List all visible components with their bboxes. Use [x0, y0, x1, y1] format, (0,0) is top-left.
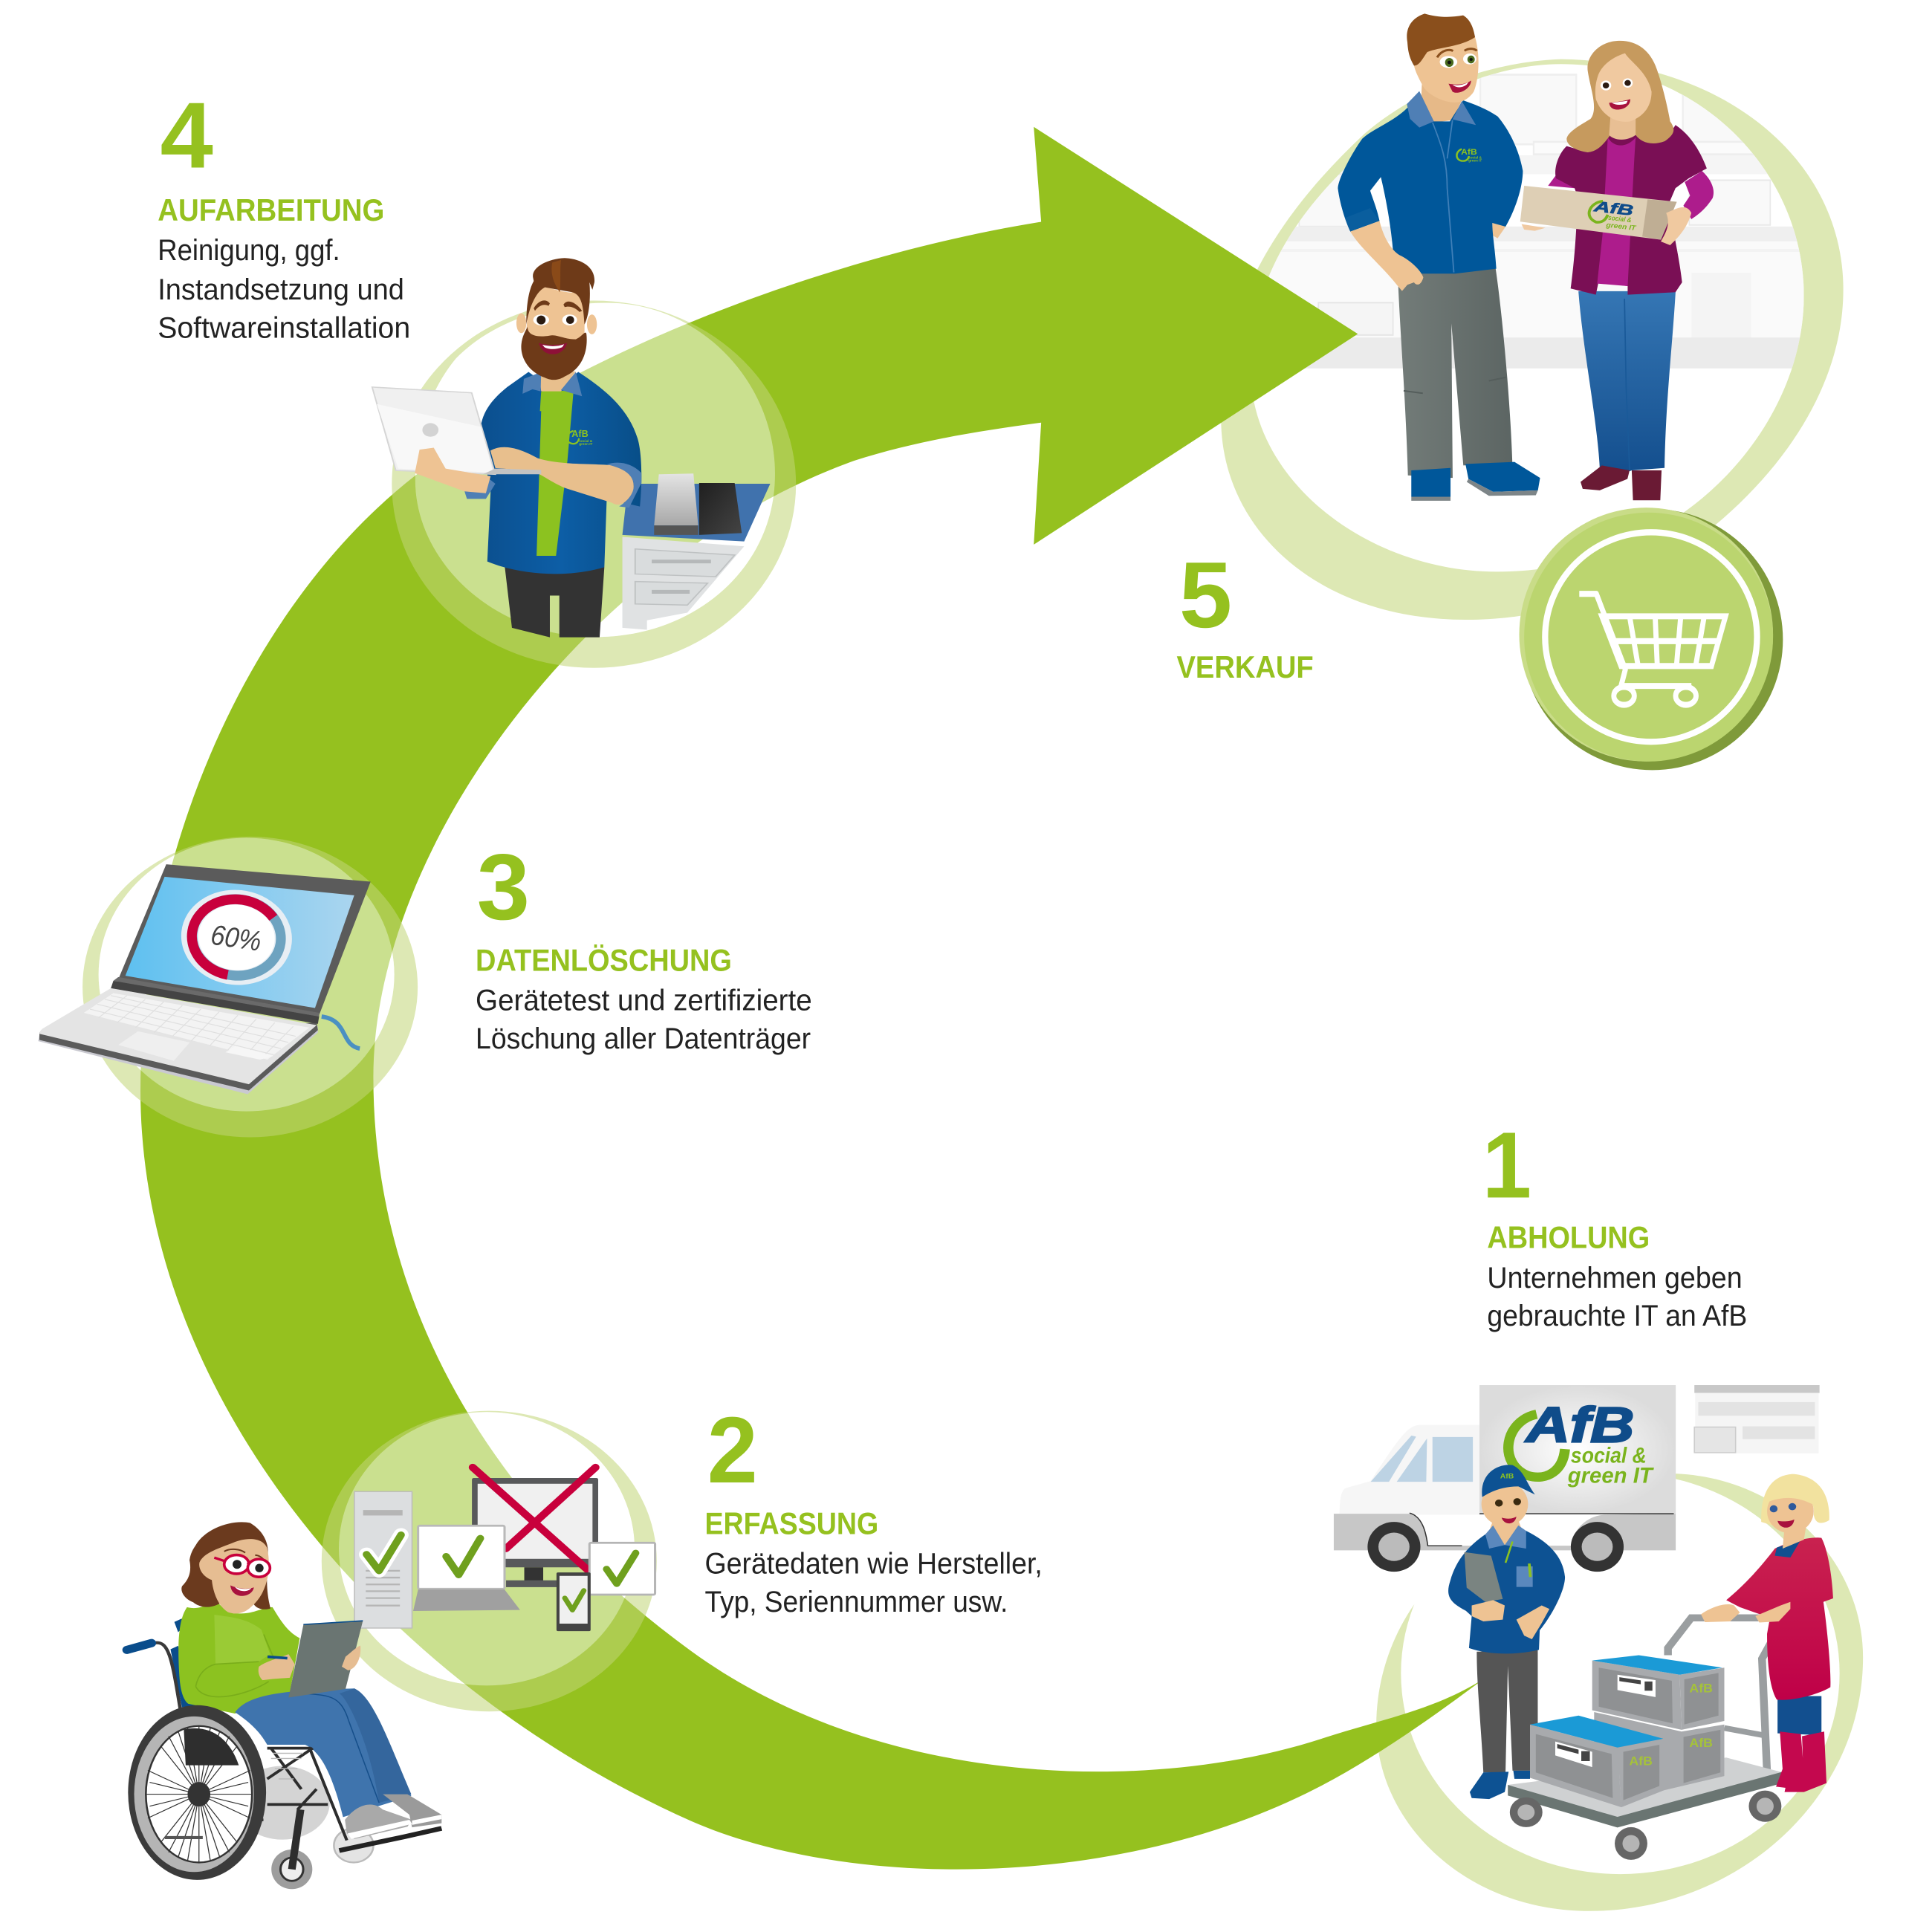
- knee seam: [305, 1693, 379, 1803]
- jacket: [480, 372, 641, 574]
- face: [1482, 1482, 1528, 1526]
- phone: [557, 1572, 591, 1631]
- monitor: [472, 1478, 598, 1587]
- eyebrows: [224, 1549, 265, 1561]
- clipboard: [288, 1621, 363, 1698]
- mouth: [1502, 1517, 1517, 1523]
- neck: [539, 372, 576, 392]
- casters: [1510, 1791, 1781, 1860]
- number 5: 5: [1179, 542, 1232, 647]
- panel: step 3 circle: [82, 837, 418, 1137]
- panel: step 5 ring: [1221, 59, 1844, 620]
- tucked hand: [1492, 221, 1505, 239]
- mouth: [1609, 99, 1630, 109]
- left cuff: [464, 477, 496, 499]
- eyes: [1601, 78, 1633, 91]
- jacket: [1448, 1531, 1565, 1653]
- front box side: [1618, 1739, 1664, 1807]
- sweater: [178, 1600, 299, 1714]
- panel: step 1 ring: [1376, 1474, 1863, 1911]
- description: Instandsetzung und: [158, 273, 404, 306]
- right hand: [1661, 207, 1691, 245]
- pupils: [233, 1560, 242, 1569]
- illustration: woman in wheelchair, step 2: [127, 1522, 441, 1889]
- rear lower box: [1594, 1712, 1724, 1790]
- rear top box side: [1679, 1667, 1724, 1730]
- hinge highlight: [114, 977, 319, 1017]
- step 5 text: [1177, 542, 1314, 684]
- clipboard edge: [303, 1621, 363, 1624]
- box: [1520, 186, 1677, 240]
- cardigan: [1555, 125, 1707, 295]
- frame mesh: [271, 1754, 303, 1779]
- laptop lid logo: [422, 423, 438, 437]
- jacket logo: social &: [579, 439, 593, 443]
- shoes: [1470, 1771, 1530, 1799]
- boots: [1581, 465, 1662, 500]
- ears: [516, 314, 597, 334]
- illustration: devices checklist, step 2: [354, 1468, 655, 1631]
- neckline: [1774, 1540, 1801, 1557]
- zip seam: [1433, 120, 1454, 273]
- description: gebrauchte IT an AfB: [1487, 1300, 1747, 1332]
- description: Gerätedaten wie Hersteller,: [704, 1547, 1043, 1580]
- hands: [1701, 1602, 1790, 1622]
- zip: [1505, 1541, 1512, 1563]
- chassis line: [1410, 1513, 1674, 1546]
- heading: VERKAUF: [1177, 649, 1314, 684]
- box logos: AfB: [1689, 1737, 1713, 1750]
- keyboard: [84, 993, 309, 1060]
- teeth: [235, 1587, 251, 1591]
- heading: DATENLÖSCHUNG: [476, 943, 732, 978]
- desk drawers: [623, 537, 744, 629]
- description: Reinigung, ggf.: [158, 234, 340, 267]
- description: [476, 985, 812, 1055]
- mouth: [1777, 1520, 1795, 1528]
- cart rail: [1724, 1728, 1763, 1735]
- description: [704, 1547, 1043, 1618]
- eyebrows: [1437, 49, 1477, 57]
- heading: AUFARBEITUNG: [158, 192, 384, 227]
- shirt: [1597, 137, 1636, 286]
- illustration: cart with boxes, step 1: [1508, 1618, 1785, 1860]
- collar: [1485, 1526, 1526, 1549]
- tower vents: [366, 1571, 400, 1606]
- cable: [322, 1017, 360, 1048]
- shoe soles: [348, 1815, 441, 1839]
- panel: step 4 circle: [392, 301, 796, 668]
- glasses: [214, 1555, 270, 1577]
- rear top box front: [1592, 1661, 1682, 1730]
- typing arm: [490, 447, 634, 505]
- mouth: [230, 1586, 254, 1596]
- sleeve line: [195, 1635, 275, 1697]
- front box lid: [1530, 1716, 1663, 1748]
- rear lower box panel: [1684, 1730, 1720, 1783]
- hair: [1761, 1474, 1829, 1526]
- description: Typ, Seriennummer usw.: [704, 1586, 1008, 1618]
- neck: [1422, 82, 1462, 123]
- teeth: [1453, 82, 1468, 87]
- shoes: [345, 1805, 412, 1839]
- cap: [1482, 1465, 1535, 1497]
- badge rim: [1520, 508, 1773, 762]
- cab windows: [1371, 1436, 1427, 1482]
- handle grip: [127, 1643, 152, 1650]
- knee creases: [1404, 377, 1506, 393]
- platform: [1508, 1757, 1783, 1817]
- drawer handles: [652, 562, 711, 591]
- eyebrows: [534, 300, 582, 312]
- push handle: [154, 1643, 181, 1712]
- number 3: 3: [477, 834, 530, 939]
- front box front: [1530, 1725, 1621, 1807]
- silver device: [654, 473, 698, 525]
- hands: [1472, 1600, 1549, 1639]
- forearm and hand on hip: [1350, 221, 1423, 291]
- chassis: [1334, 1514, 1676, 1550]
- tower slot: [363, 1510, 403, 1515]
- wheels: [1367, 1522, 1624, 1572]
- shoe soles: [1411, 479, 1538, 501]
- icon: shopping cart badge: [1520, 508, 1783, 770]
- rear top box panel: [1599, 1667, 1673, 1723]
- face: [1414, 37, 1479, 103]
- progress label: 60%: [209, 919, 263, 958]
- laptop lid: [372, 387, 496, 474]
- main wheel: [128, 1705, 266, 1880]
- step 4 text: [158, 83, 410, 344]
- jacket logo: [567, 429, 593, 446]
- rear wheel behind: [235, 1766, 330, 1840]
- AfB logo: AfB: [1524, 1396, 1634, 1453]
- green shirt: [537, 391, 574, 556]
- sweater highlight: [214, 1615, 270, 1664]
- box logo: AfB: [1592, 198, 1634, 219]
- fringe: [1767, 1480, 1816, 1506]
- rolled cuff: [607, 463, 641, 508]
- shoes: [1411, 462, 1540, 497]
- badge face: [1524, 513, 1773, 762]
- illustration: delivery truck: [1334, 1385, 1820, 1572]
- description: Softwareinstallation: [158, 311, 410, 344]
- box logos: AfB: [1629, 1754, 1653, 1769]
- teeth: [542, 344, 564, 349]
- footrest: [340, 1829, 441, 1850]
- cart: [1579, 594, 1725, 705]
- cart handle: [1668, 1618, 1785, 1772]
- laptop base shadow: [38, 1026, 318, 1094]
- illustration: technician with laptop, step 4: [372, 258, 771, 638]
- description: Gerätetest und zertifizierte: [476, 985, 812, 1017]
- teeth: [1612, 101, 1627, 105]
- rear label: [1618, 1675, 1656, 1697]
- neck: [1489, 1520, 1523, 1545]
- number 4: 4: [161, 83, 213, 188]
- illustration: laptop with deletion progress, step 3: [38, 864, 371, 1094]
- progress dial: [176, 884, 296, 991]
- drawer fronts: [635, 549, 735, 605]
- white ring: [1545, 532, 1757, 742]
- platform edge: [1508, 1771, 1783, 1827]
- front box panel: [1536, 1734, 1612, 1798]
- front box side panel: [1624, 1745, 1659, 1800]
- eyes: [1440, 54, 1476, 68]
- rear top box lid: [1592, 1655, 1722, 1675]
- heading: ERFASSUNG: [704, 1505, 878, 1540]
- tablet: [589, 1543, 655, 1595]
- box logo: green IT: [1605, 221, 1637, 233]
- AfB logo: social &: [1571, 1443, 1647, 1468]
- device stack: [654, 525, 698, 535]
- face: [1767, 1489, 1814, 1533]
- cuff: [1345, 208, 1379, 232]
- laptop base: [39, 988, 317, 1084]
- laptop: [413, 1526, 520, 1611]
- armpit gap: [1485, 163, 1497, 202]
- face: [1595, 54, 1652, 122]
- illustration: man in blue jacket, step 5: [1338, 13, 1540, 501]
- collar: [522, 372, 582, 396]
- chair frame: [165, 1748, 347, 1841]
- eyes: [1495, 1498, 1521, 1507]
- clipboard: [1465, 1552, 1503, 1602]
- legs: [235, 1688, 411, 1817]
- lid: [117, 864, 371, 1022]
- black device: [699, 483, 742, 535]
- pen: [268, 1657, 288, 1659]
- heading: ABHOLUNG: [1487, 1220, 1650, 1255]
- mouth: [1448, 80, 1471, 93]
- back rest: [170, 1618, 197, 1708]
- box logos: [1629, 1682, 1713, 1769]
- box logos: AfB: [1689, 1682, 1713, 1696]
- illustration: woman pushing cart, step 1: [1701, 1474, 1833, 1792]
- key pad corner: [225, 1046, 273, 1060]
- shirt neck: [540, 392, 561, 411]
- checkmarks: [366, 1535, 636, 1610]
- dress: [1726, 1537, 1833, 1700]
- laptop base edge: [39, 1022, 318, 1090]
- eyes: [1770, 1503, 1796, 1512]
- front label: [1555, 1742, 1592, 1767]
- illustration: woman holding box, step 5: [1520, 41, 1714, 500]
- description: [1487, 1262, 1747, 1332]
- rear top box side panel: [1685, 1673, 1719, 1725]
- building: [1694, 1385, 1820, 1453]
- laptop base: [483, 469, 541, 474]
- neck: [217, 1598, 255, 1613]
- boots: [1776, 1731, 1826, 1792]
- desk top: [623, 484, 771, 542]
- far leg shade: [340, 1688, 411, 1803]
- panel: step 1 interior: [1401, 1473, 1840, 1874]
- sleeves: [1548, 171, 1714, 219]
- writing hand: [259, 1654, 295, 1680]
- legs: [1777, 1696, 1821, 1735]
- face: [199, 1539, 269, 1613]
- AfB logo: green IT: [1567, 1463, 1655, 1488]
- front caster rear: [334, 1829, 373, 1862]
- trousers: [1398, 266, 1512, 478]
- pocket: [1517, 1566, 1533, 1587]
- cap logo: AfB: [1500, 1473, 1514, 1480]
- hair: [526, 258, 594, 325]
- step 3 text: [476, 834, 812, 1055]
- jacket logo: green IT: [1468, 158, 1482, 162]
- mouth: [539, 343, 567, 354]
- tower: [354, 1491, 412, 1628]
- arrow: main circular process arrow: [140, 127, 1485, 1870]
- hair: [181, 1522, 270, 1610]
- box logo: [1587, 198, 1640, 233]
- face: [525, 288, 585, 347]
- hair highlight: [551, 260, 561, 292]
- AfB logo: [1508, 1396, 1655, 1488]
- collar: [1407, 91, 1476, 128]
- description: Unternehmen geben: [1487, 1262, 1743, 1294]
- illustration: courier with clipboard, step 1: [1448, 1465, 1565, 1799]
- number 1: 1: [1482, 1113, 1531, 1218]
- holding hand: [415, 448, 490, 493]
- trousers: [1476, 1650, 1537, 1772]
- step 1 text: [1482, 1113, 1747, 1332]
- left hand: [1522, 224, 1546, 231]
- illustration: store shelves background: [1263, 74, 1809, 369]
- description: Löschung aller Datenträger: [476, 1022, 811, 1055]
- description: [158, 234, 410, 344]
- holding hand: [342, 1646, 360, 1670]
- neck: [1783, 1527, 1806, 1549]
- box logo: social &: [1608, 214, 1632, 224]
- number 2: 2: [707, 1398, 758, 1503]
- red cross: [473, 1468, 595, 1572]
- jeans: [1578, 291, 1676, 472]
- caster wheel: [271, 1809, 312, 1889]
- box side panel: [1642, 199, 1677, 240]
- screen: [126, 877, 354, 1008]
- lid highlight: [377, 404, 493, 473]
- hinge: [111, 981, 319, 1024]
- hair: [1566, 41, 1673, 152]
- truck box: [1479, 1385, 1676, 1514]
- jacket logo: green IT: [579, 442, 593, 446]
- badge shadow: [1522, 509, 1783, 770]
- jacket logo: [1456, 147, 1482, 162]
- cab: [1340, 1425, 1479, 1515]
- jacket: [1338, 100, 1523, 273]
- jacket logo: AfB: [571, 429, 589, 439]
- step 2 text: [704, 1398, 1043, 1618]
- touchpad: [118, 1031, 189, 1061]
- jacket logo: AfB: [1461, 147, 1477, 157]
- beard: [521, 327, 587, 380]
- pen: [1529, 1563, 1531, 1577]
- neck: [1609, 117, 1636, 140]
- leg seam: [1624, 299, 1630, 470]
- panel: step 2 circle: [322, 1411, 657, 1711]
- hair: [1407, 13, 1475, 65]
- jacket logo: social &: [1468, 155, 1482, 159]
- trousers: [505, 567, 604, 638]
- eyes: [534, 314, 577, 325]
- panel: step 5 interior: [1251, 64, 1804, 571]
